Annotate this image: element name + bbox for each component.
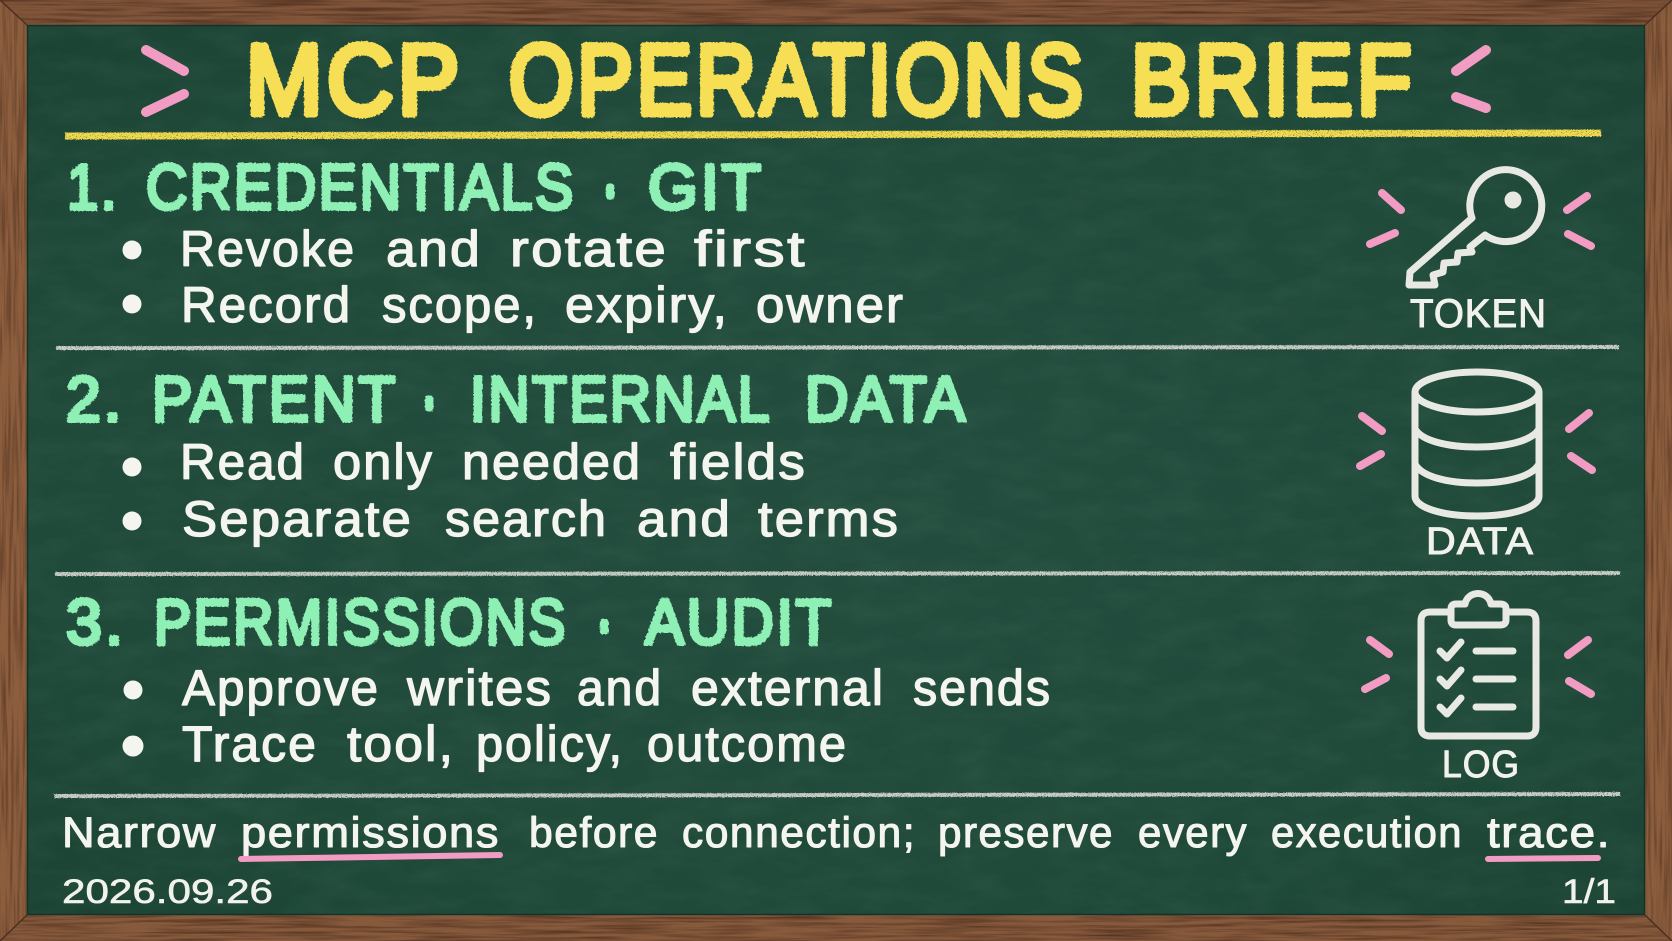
icon: token key: [1370, 170, 1591, 336]
icon: token key: TOKEN: [1410, 292, 1547, 336]
section 3 bullet 2: outcome: [647, 716, 848, 772]
section 3 bullet 2: policy,: [476, 716, 624, 772]
section 1 bullet 1: Revoke: [180, 221, 356, 277]
section 2 bullet 2: [122, 491, 900, 547]
section 1 heading: GIT: [648, 151, 764, 223]
section 1 bullet 1: [122, 221, 807, 277]
divider 1: [56, 347, 1619, 348]
section 1 bullet 1: rotate: [510, 221, 668, 277]
section 2 bullet 1: needed: [462, 434, 642, 490]
section 3 bullet 1: Approve: [182, 660, 380, 716]
section 2: patent and internal data: [66, 363, 1592, 563]
section 3 bullet 2: Trace: [182, 716, 318, 772]
section 1 bullet 2: Record: [181, 277, 352, 333]
section 3 heading: ·: [598, 586, 612, 658]
section 3 bullet 1: external: [691, 660, 885, 716]
section 3 bullet 1: and: [577, 660, 663, 716]
takeaway sentence: trace.: [1487, 809, 1611, 857]
takeaway sentence: Narrow: [62, 809, 217, 857]
icon: clipboard log: [1365, 594, 1591, 786]
takeaway sentence: [62, 809, 1611, 859]
section 1 heading: 1.: [67, 151, 119, 223]
section 3 bullet 1: [124, 660, 1052, 716]
section 2 bullet 1: fields: [670, 434, 807, 490]
pink underline: trace: [1488, 858, 1598, 859]
section 1 bullet 2: [122, 277, 905, 333]
section 2 bullet 2: and: [637, 491, 732, 547]
section 2 bullet 1: Read: [180, 434, 306, 490]
date: 2026.09.26: [62, 873, 273, 911]
takeaway sentence: preserve: [938, 809, 1114, 857]
section 3 heading: 3.: [66, 586, 126, 658]
section 3 bullet 1: writes: [406, 660, 553, 716]
takeaway sentence: before: [529, 809, 659, 857]
section 2 bullet 2: search: [445, 491, 608, 547]
section 1 bullet 1: and: [386, 221, 482, 277]
section 2 heading: INTERNAL: [470, 363, 770, 435]
section 1: credentials and git: [67, 151, 1591, 336]
title accent marks left: [146, 50, 184, 112]
section 3: permissions and audit: [66, 586, 1591, 786]
takeaway sentence: permissions: [241, 809, 500, 857]
page number: 1/1: [1562, 873, 1616, 911]
section 2 heading: PATENT: [152, 363, 397, 435]
section 2 heading: 2.: [66, 363, 124, 435]
title: OPERATIONS: [509, 24, 1087, 135]
section 3 bullet 2: [122, 716, 848, 772]
section 3 bullet 1: sends: [913, 660, 1052, 716]
title accent marks right: [1456, 50, 1486, 108]
section 1 bullet 2: owner: [756, 277, 905, 333]
icon: clipboard log: LOG: [1442, 744, 1520, 786]
section 3 heading: PERMISSIONS: [154, 586, 568, 658]
section 2 bullet 1: only: [333, 434, 434, 490]
takeaway sentence: every: [1138, 809, 1248, 857]
section 3 bullet 2: tool,: [347, 716, 455, 772]
takeaway sentence: connection;: [682, 809, 916, 857]
section 2 heading: ·: [423, 363, 437, 435]
section 2 bullet 1: [122, 434, 807, 490]
section 2 bullet 2: Separate: [182, 491, 413, 547]
section 1 bullet 2: scope,: [382, 277, 538, 333]
title: MCP: [246, 24, 462, 135]
section 3 heading: AUDIT: [645, 586, 834, 658]
section 1 bullet 2: expiry,: [565, 277, 729, 333]
title underline: [65, 133, 1601, 136]
section 1 heading: CREDENTIALS: [146, 151, 576, 223]
icon: database: [1360, 372, 1592, 563]
title block: [65, 24, 1601, 136]
section 1 bullet 1: first: [694, 221, 807, 277]
section 2 bullet 2: terms: [758, 491, 900, 547]
divider 3: [54, 794, 1620, 796]
title: BRIEF: [1131, 24, 1416, 135]
divider 2: [55, 573, 1620, 574]
section 1 heading: ·: [604, 151, 618, 223]
section 2 heading: DATA: [805, 363, 968, 435]
pink underline: permissions: [241, 855, 500, 859]
takeaway sentence: execution: [1271, 809, 1463, 857]
icon: database: DATA: [1426, 521, 1534, 563]
